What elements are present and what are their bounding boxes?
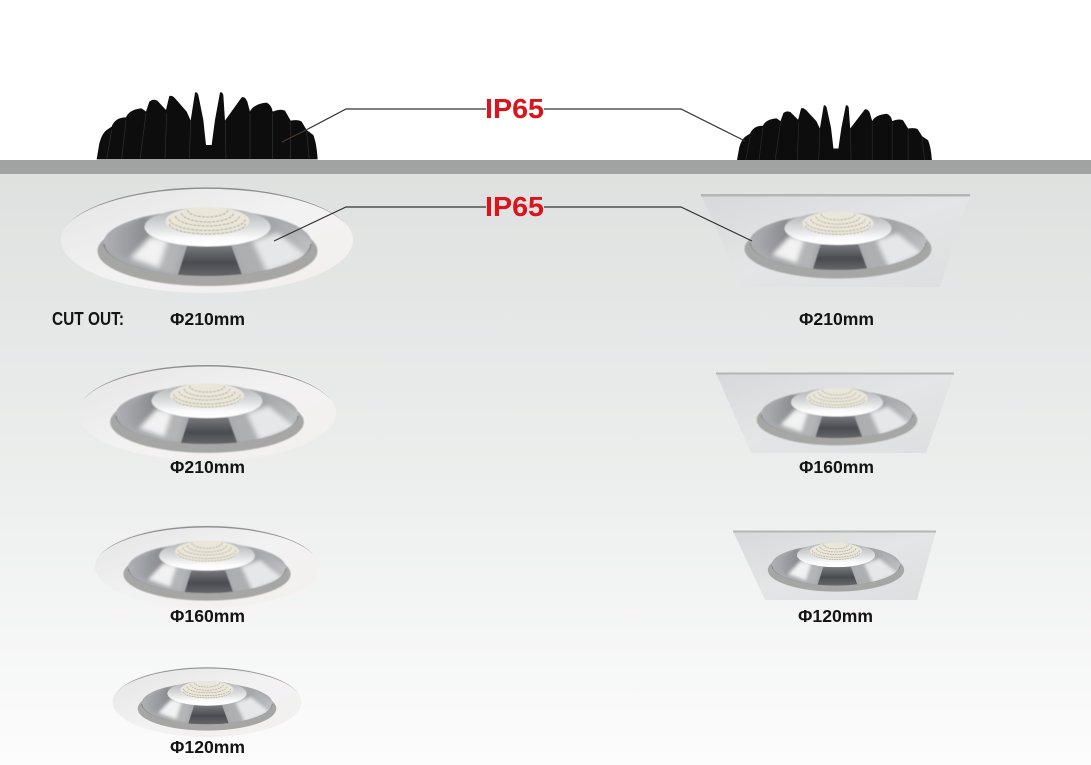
round downlight 2 — [78, 364, 336, 461]
size label: square 1: Φ210mm — [799, 309, 874, 329]
round downlight 4 — [112, 667, 302, 737]
size label: round 4: Φ120mm — [170, 737, 245, 757]
size label: round 2: Φ210mm — [170, 457, 245, 477]
size label: round 1: Φ210mm — [170, 309, 245, 329]
square downlight 1 — [701, 194, 970, 287]
square downlight 3 — [733, 530, 936, 600]
round downlight 3 — [95, 525, 319, 608]
round downlight 1 — [61, 187, 353, 293]
ceiling section band — [0, 160, 1091, 174]
size label: square 2: Φ160mm — [799, 457, 874, 477]
label: upper IP65: IP65 — [485, 93, 544, 124]
leader lines: lower IP65 — [274, 207, 752, 241]
label: cut out: CUT OUT: — [52, 309, 124, 329]
square downlight 2 — [716, 372, 954, 453]
ceiling background — [0, 174, 1091, 765]
size label: square 3: Φ120mm — [798, 606, 873, 626]
size label: round 3: Φ160mm — [170, 606, 245, 626]
leader lines: upper IP65 — [282, 109, 745, 142]
heat sink: square lamp — [737, 105, 932, 160]
heat sink: round lamp — [97, 92, 318, 159]
label: lower IP65: IP65 — [485, 191, 544, 222]
